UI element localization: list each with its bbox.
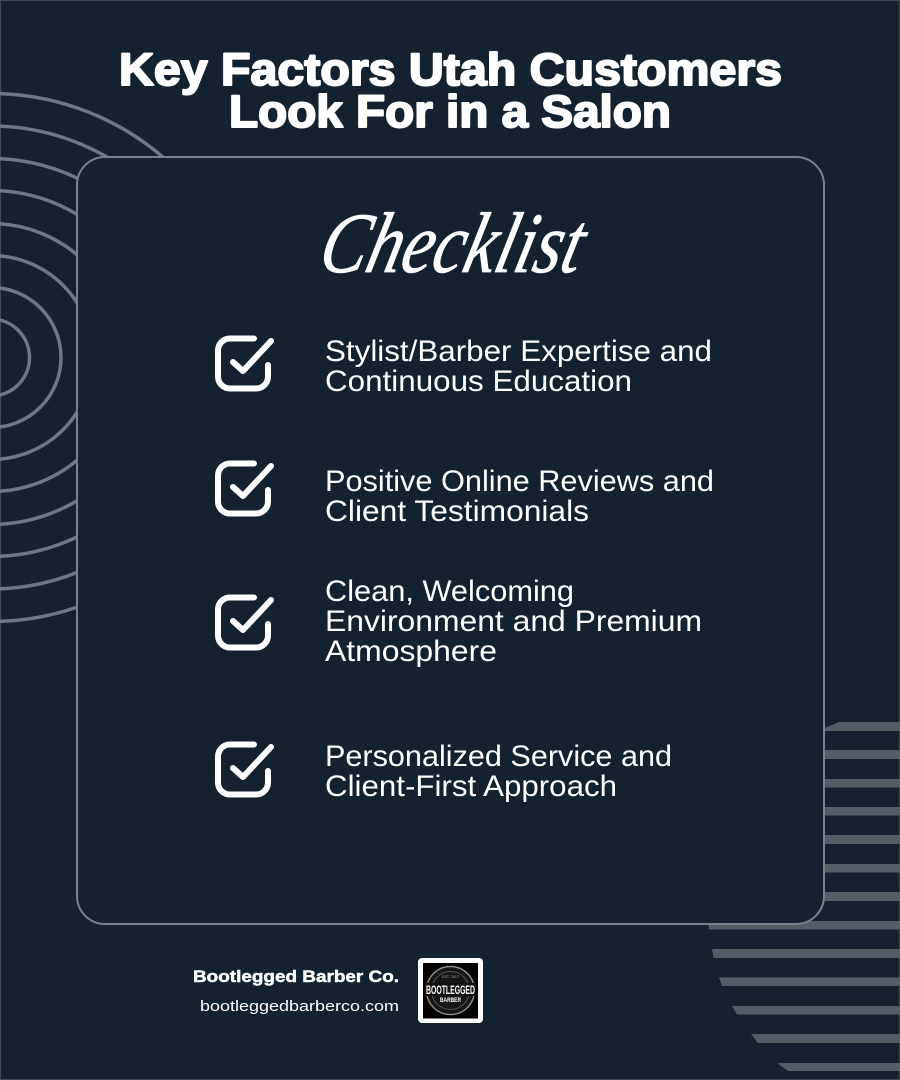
checklist item 3: [218, 575, 702, 668]
text: item 4: Personalized Service and: [325, 740, 672, 773]
footer: brand name and website: bootleggedbarberco.com: [200, 998, 399, 1015]
panel: checklist card: [77, 157, 824, 924]
text: item 4: Client-First Approach: [325, 770, 617, 803]
text: item 1: Stylist/Barber Expertise and: [325, 335, 712, 368]
text: item 2: Client Testimonials: [325, 495, 589, 528]
footer: brand name and website: [193, 967, 399, 1015]
checklist item 2: [218, 464, 714, 528]
text: item 2: Positive Online Reviews and: [325, 465, 714, 498]
icon: checkbox 1: [218, 338, 271, 388]
logo badge: BARBER: [440, 998, 462, 1004]
logo badge: EST. 2017: [442, 974, 460, 979]
concentric circles decoration: [0, 94, 255, 622]
text: item 4: [325, 740, 672, 803]
icon: checkbox 4: [218, 744, 271, 794]
title: Look For in a Salon: [229, 86, 671, 137]
striped decoration: [708, 722, 900, 1071]
title: Key Factors Utah Customers: [119, 44, 782, 95]
checklist item 4: [218, 740, 672, 803]
text: item 3: Environment and Premium: [325, 605, 702, 638]
footer: brand name and website: Bootlegged Barber Co.: [193, 967, 399, 986]
checklist item 1: [218, 335, 712, 398]
icon: checkbox 2: [218, 464, 271, 514]
title: [119, 44, 782, 137]
text: item 3: [325, 575, 702, 668]
logo badge: BOOTLEGGED: [426, 983, 475, 997]
text: item 2: [325, 465, 714, 528]
icon: checkbox 3: [218, 598, 271, 648]
text: item 1: [325, 335, 712, 398]
text: item 3: Atmosphere: [325, 635, 497, 668]
logo badge: [418, 958, 483, 1023]
text: item 1: Continuous Education: [325, 365, 632, 398]
text: item 3: Clean, Welcoming: [325, 575, 574, 608]
heading: Checklist: Checklist: [311, 195, 598, 291]
